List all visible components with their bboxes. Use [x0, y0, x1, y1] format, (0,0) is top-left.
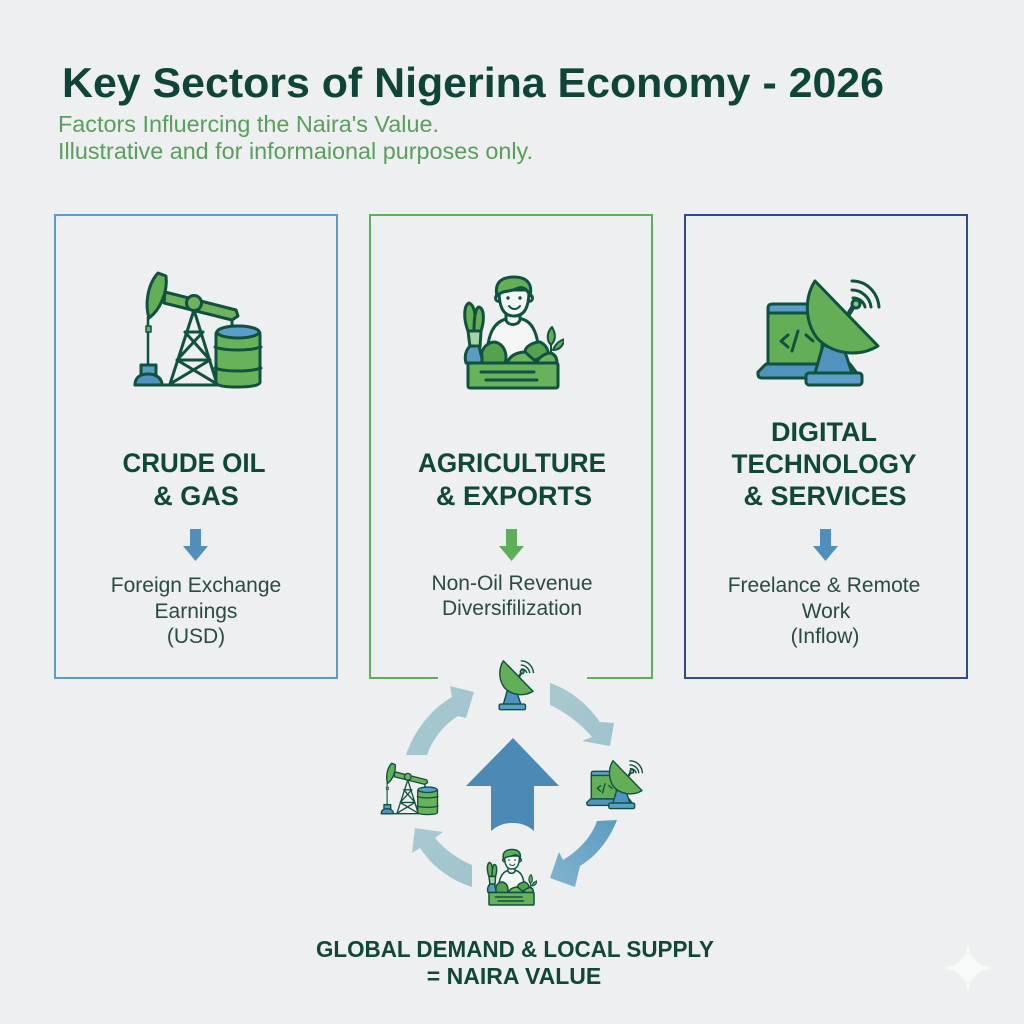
arrow: down blue: [183, 529, 208, 561]
arrow: top left: [406, 686, 474, 755]
text: non-oil revenue diversifilization: Non-Oil Revenue: [431, 572, 593, 595]
icon: oil pump and barrel: [135, 273, 261, 387]
icon: small satellite dish: [499, 661, 533, 710]
panel: crude oil and gas: [55, 215, 337, 678]
panel: digital technology and services: [685, 215, 967, 678]
heading: digital technology and services: & SERVICES: [743, 481, 907, 511]
arrow: central up arrow: [466, 738, 559, 831]
heading: agriculture and exports: AGRICULTURE: [418, 448, 606, 478]
text: foreign exchange earnings: [111, 574, 281, 648]
icon: laptop and satellite dish: [758, 281, 879, 385]
text: freelance and remote work: Freelance & Remote: [728, 574, 920, 597]
icon: small laptop and dish: [587, 761, 642, 809]
text: non-oil revenue diversifilization: [431, 572, 593, 620]
panel: agriculture and exports: [370, 215, 652, 678]
heading: digital technology and services: DIGITAL: [771, 417, 877, 447]
heading: crude oil and gas: [122, 448, 266, 511]
icon: small farmer: [487, 850, 538, 905]
subtitle: Factors Influercing the Naira's Value.: [58, 111, 439, 137]
text: freelance and remote work: (Inflow): [791, 625, 859, 648]
icon: small oil pump: [381, 763, 438, 815]
arrow: down navy blue: [813, 529, 838, 561]
icon: sparkle watermark: [943, 943, 993, 993]
heading: crude oil and gas: CRUDE OIL: [122, 448, 266, 478]
subtitle: Illustrative and for informaional purposes only.: [58, 138, 533, 164]
text: non-oil revenue diversifilization: Diversifilization: [442, 597, 582, 620]
text: foreign exchange earnings: (USD): [167, 625, 225, 648]
arrow: bottom right: [550, 820, 617, 887]
subtitle: [58, 111, 533, 164]
heading: agriculture and exports: & EXPORTS: [436, 481, 592, 511]
cycle diagram: [381, 661, 642, 905]
title: Key Sectors of Nigerina Economy - 2026: [62, 59, 884, 106]
text: freelance and remote work: Work: [802, 600, 851, 623]
text: foreign exchange earnings: Foreign Exchange: [111, 574, 281, 597]
arrow: top right: [550, 683, 614, 746]
heading: digital technology and services: TECHNOLOGY: [732, 449, 916, 479]
conclusion text: = NAIRA VALUE: [427, 963, 601, 989]
heading: crude oil and gas: & GAS: [153, 481, 239, 511]
text: foreign exchange earnings: Earnings: [155, 600, 237, 623]
arrow: down green: [499, 529, 524, 561]
icon: farmer with produce crate: [465, 277, 565, 388]
conclusion text: [316, 936, 714, 989]
conclusion text: GLOBAL DEMAND & LOCAL SUPPLY: [316, 936, 714, 962]
heading: digital technology and services: [732, 417, 916, 511]
text: freelance and remote work: [728, 574, 920, 648]
heading: agriculture and exports: [418, 448, 606, 511]
arrow: bottom left: [412, 828, 472, 887]
